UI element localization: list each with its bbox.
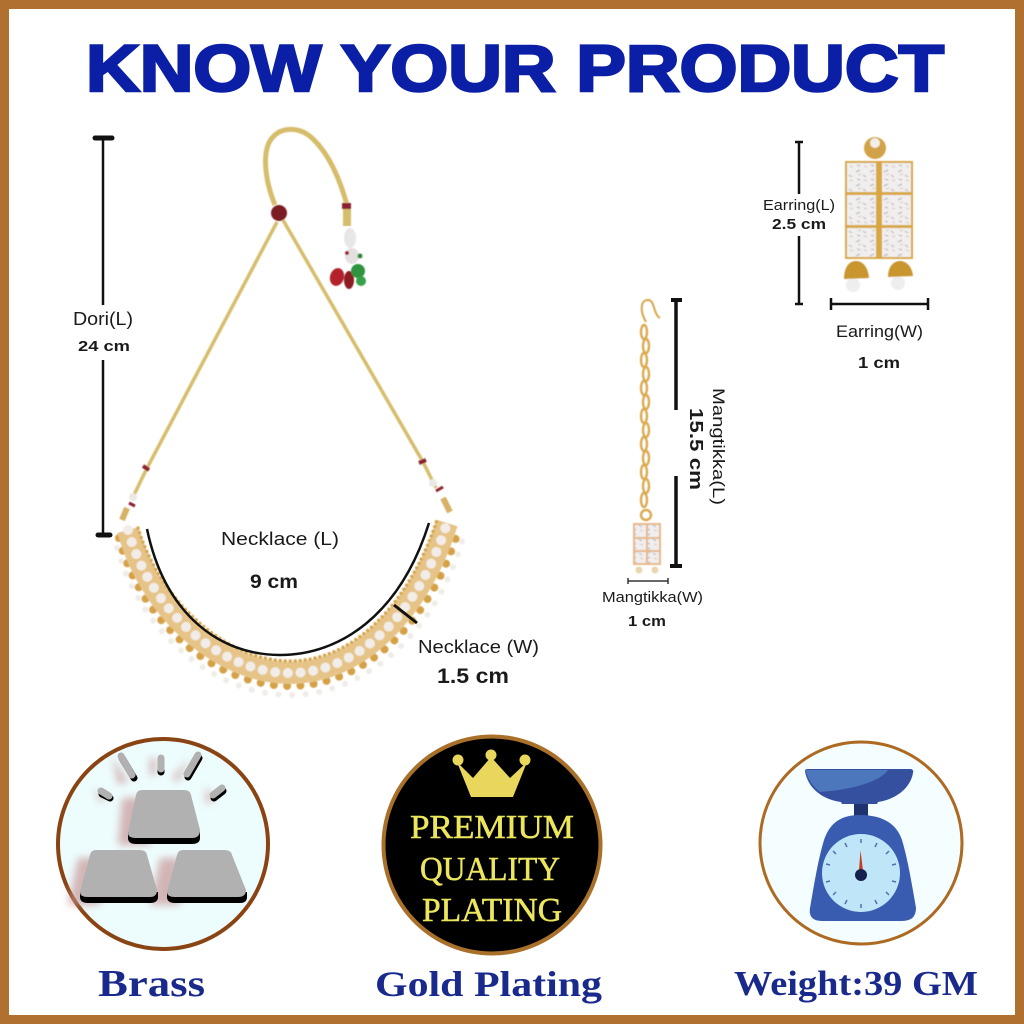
earring length dimension line [795,142,803,304]
brass bars [80,790,247,903]
earring stones [847,163,911,257]
badge: premium quality plating [384,736,600,954]
premium text: PREMIUM [410,809,574,846]
mangtikka illustration [633,300,661,574]
label: brass: Brass [98,963,205,1005]
earring width line [831,298,928,310]
hook [642,300,660,322]
necklace body [117,520,463,695]
quality text: QUALITY [420,851,560,888]
chain [641,325,651,520]
top stud [864,137,886,159]
dori cord right strand [283,220,436,488]
badge: weight scale [760,742,962,944]
earring width label: Earring(W) [836,323,923,341]
brass sparkle rays [101,755,223,798]
earring length value: 2.5 cm [772,216,826,233]
mangtikka width line [628,578,668,584]
label: gold plating: Gold Plating [375,964,602,1004]
earring frame [845,161,913,259]
scale body [810,815,916,921]
necklace width tick [394,605,417,623]
needle hub [855,869,867,881]
necklace width label: Necklace (W) [418,636,539,657]
scale needle [859,850,863,871]
dori value: 24 cm [78,338,130,355]
necklace length value: 9 cm [250,572,298,593]
necklace illustration [117,129,463,695]
earring width value: 1 cm [858,355,900,372]
right cord ornaments [419,460,450,512]
dori length dimension line [95,138,112,535]
necklace width value: 1.5 cm [437,665,509,688]
dial ticks [826,839,896,908]
mangtikka length value: 15.5 cm [686,408,706,490]
label: weight: Weight:39 GM [734,964,978,1003]
necklace length arc [147,523,429,655]
pendant [633,523,661,574]
mangtikka width label: Mangtikka(W) [602,589,703,606]
crown [452,750,530,797]
necklace length label: Necklace (L) [221,528,339,549]
dori label: Dori(L) [73,309,133,329]
mangtikka length label: Mangtikka(L) [709,388,728,505]
right drop [888,261,913,290]
mangtikka length dimension line [670,300,682,566]
dori cord loop [266,129,347,205]
earring illustration [844,137,913,292]
badge: brass [58,739,268,949]
scale bowl [805,769,913,804]
left cord ornaments [122,466,149,520]
brass bar shadows [68,756,214,905]
bowl highlight [806,770,888,792]
scale stem [854,804,868,816]
title: KNOW YOUR PRODUCT [86,31,944,105]
mangtikka width value: 1 cm [628,613,666,630]
plating text: PLATING [422,892,562,929]
dori cord left strand [133,222,277,497]
wooden bead [271,205,287,221]
left drop [844,261,869,292]
earring length label: Earring(L) [763,198,835,214]
scale dial [822,834,900,912]
tassel with coloured stones [328,203,366,289]
